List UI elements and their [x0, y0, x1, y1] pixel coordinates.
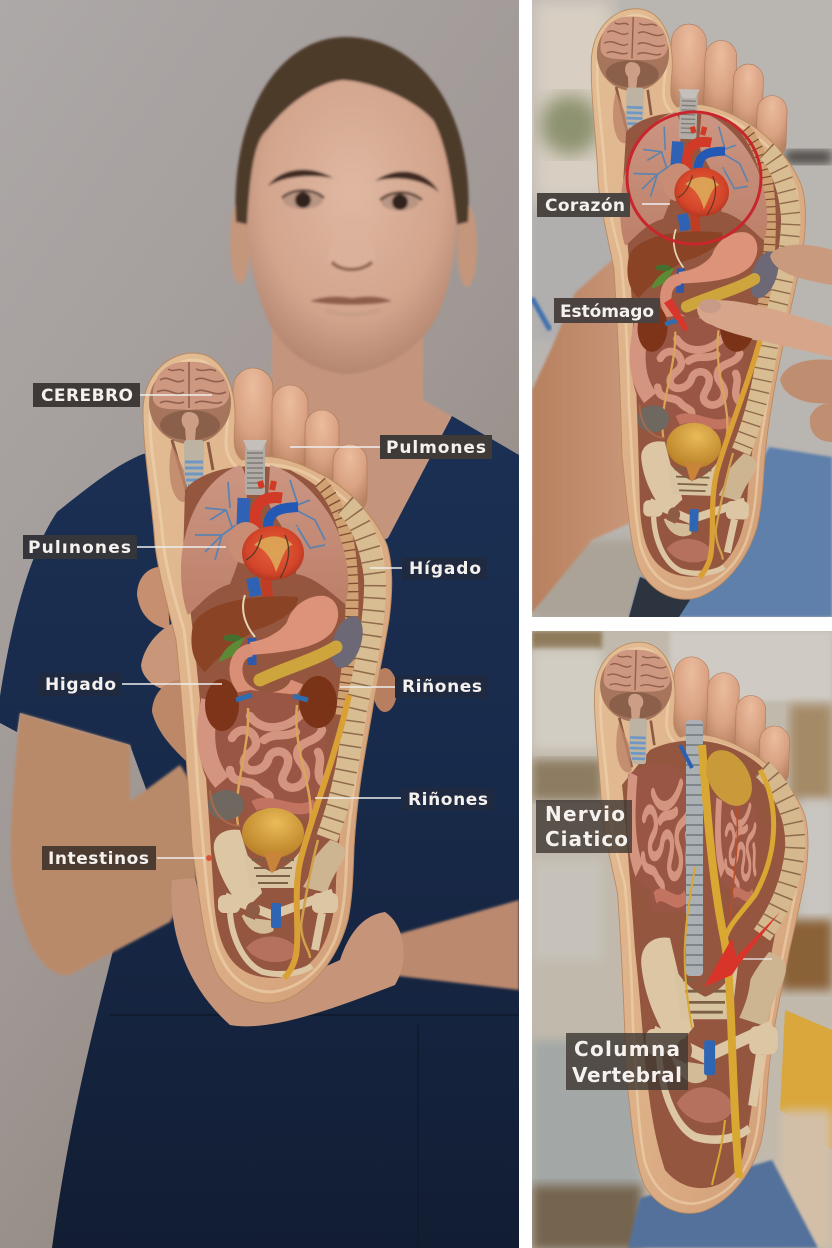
blurred room background — [532, 631, 832, 1248]
label: Columna Vertebral: Columna — [574, 1037, 680, 1061]
label: Higado left: Higado — [45, 675, 116, 695]
label: Higado left — [38, 673, 222, 696]
label: CEREBRO: CEREBRO — [41, 386, 133, 406]
left arm — [11, 713, 196, 975]
pointing fingers — [697, 245, 832, 442]
label: Intestinos: Intestinos — [48, 849, 149, 869]
sciatic nerve — [685, 745, 774, 1185]
eyebrows — [268, 170, 439, 192]
background wall — [0, 0, 519, 1248]
label: Nervio Ciatico: Ciatico — [545, 827, 628, 851]
intestine mass right — [716, 790, 757, 905]
label: Columna Vertebral: Vertebral — [572, 1063, 682, 1087]
face skin — [247, 80, 457, 374]
jeans — [629, 447, 832, 617]
intestine mass left — [626, 772, 686, 908]
dark cloth — [629, 577, 690, 617]
panel: nurse holding foot model — [0, 0, 519, 1248]
label: Riñones lower: Riñones — [408, 790, 488, 810]
neck — [271, 328, 452, 539]
blue vessel — [680, 745, 692, 768]
label: Pulmones left: Pulınones — [28, 538, 131, 558]
label: Corazón — [537, 193, 670, 217]
mouth — [310, 296, 392, 305]
label: Intestinos — [42, 846, 212, 870]
label: Corazón: Corazón — [545, 196, 625, 216]
nose — [328, 215, 376, 270]
right forearm — [390, 900, 519, 990]
foot model — [143, 353, 392, 1003]
supporting hand — [532, 260, 630, 613]
pelvis bones — [641, 938, 786, 1140]
label: Hígado right: Hígado — [409, 559, 481, 579]
label: Riñones upper — [340, 675, 488, 698]
nerve plexus — [706, 750, 752, 806]
label: Pulmones right — [290, 435, 492, 459]
hand fingers behind foot — [137, 567, 397, 765]
scrubs — [0, 416, 519, 1248]
label: Nervio Ciatico: Nervio — [545, 802, 625, 826]
panel: heart and stomach detail — [532, 0, 832, 620]
label: Hígado right — [370, 557, 487, 580]
hair — [235, 37, 469, 225]
ears — [230, 200, 250, 284]
eyes — [283, 191, 323, 209]
lower hand — [171, 878, 404, 1026]
jeans knee — [628, 1160, 818, 1248]
foot model — [574, 7, 812, 603]
pointer line — [737, 958, 772, 960]
label: Pulmones left — [23, 535, 226, 559]
central vertebral column — [686, 720, 703, 976]
label: Columna Vertebral — [566, 1033, 688, 1090]
label: Riñones upper: Riñones — [402, 677, 482, 697]
spine right band — [762, 769, 795, 935]
label: CEREBRO — [33, 383, 212, 407]
red pointer — [664, 298, 688, 332]
label: Estómago: Estómago — [560, 302, 654, 322]
panel: sciatic nerve and spine detail — [532, 631, 832, 1248]
label: Nervio Ciatico — [536, 800, 632, 853]
label: Riñones lower — [315, 788, 494, 811]
organ cavity — [622, 740, 786, 1188]
red circle highlight — [627, 112, 761, 244]
label: Pulmones right: Pulmones — [386, 438, 486, 458]
foot shell — [579, 641, 814, 1216]
head — [230, 37, 477, 374]
red arrow — [704, 912, 780, 987]
brain — [598, 649, 673, 774]
blurred room background — [532, 0, 832, 620]
